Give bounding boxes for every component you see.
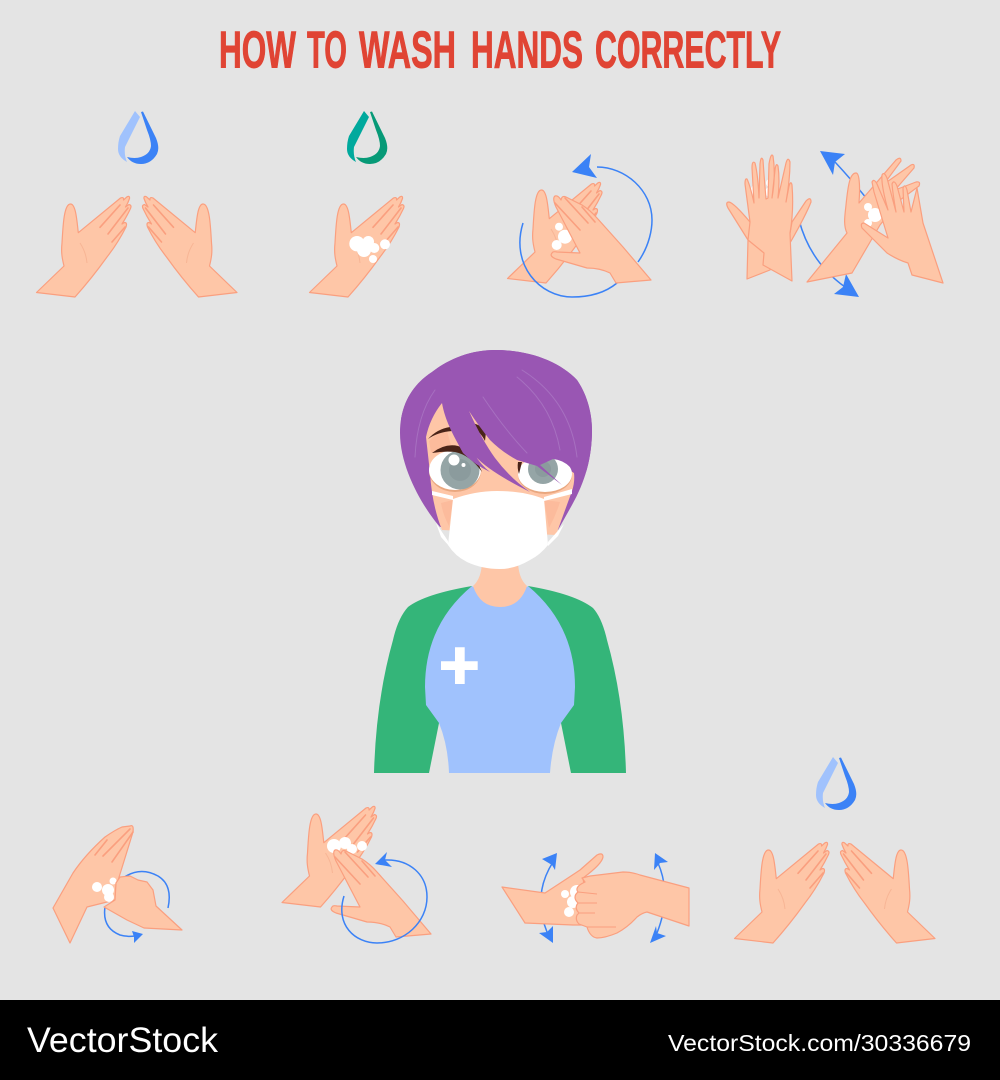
face mask — [432, 489, 572, 569]
step 8: final rinse — [734, 757, 935, 943]
title: WASH — [359, 22, 456, 80]
step 6: rub palm with fingertips — [282, 806, 431, 943]
hand seen from back — [727, 155, 811, 281]
arrows — [105, 871, 169, 943]
neck — [473, 560, 527, 607]
left hand — [502, 854, 603, 925]
soap foam — [552, 223, 572, 250]
hand with fingers up — [53, 826, 133, 943]
watermark bar — [0, 1000, 1000, 1080]
title: HANDS — [471, 22, 583, 80]
front hand — [331, 850, 431, 937]
open hand — [310, 196, 404, 297]
step 5: scrub thumbs — [53, 826, 182, 943]
eyebrow — [428, 423, 486, 441]
title: HOW — [219, 22, 297, 80]
left open hand — [734, 842, 829, 943]
central figure: nurse with mask — [374, 340, 626, 773]
step 7: interlock fingers — [502, 853, 689, 943]
right open hand — [142, 196, 237, 297]
watermark url: VectorStock.com/30336679 — [668, 1030, 971, 1056]
soap foam — [561, 885, 584, 917]
body — [374, 586, 626, 773]
title — [219, 22, 781, 80]
soap foam — [864, 201, 893, 227]
step 1: rinse hands under water — [36, 111, 237, 297]
blue shirt — [425, 586, 575, 773]
icon: water drop green — [347, 111, 387, 164]
hair highlights — [415, 370, 577, 457]
back right hand — [807, 158, 920, 282]
hair back — [400, 350, 592, 530]
face — [426, 403, 574, 535]
fist hand — [104, 876, 182, 930]
soap foam — [349, 236, 390, 263]
hair fringe — [401, 350, 592, 492]
back hand — [508, 182, 602, 283]
white cross — [441, 647, 478, 684]
step 3: rub palms — [508, 154, 652, 297]
soap foam — [92, 878, 116, 902]
right eye — [518, 454, 572, 494]
right hand — [575, 872, 689, 938]
icon: water drop blue — [816, 757, 856, 810]
right open hand — [840, 842, 935, 943]
title: TO — [307, 22, 347, 80]
arrows — [541, 862, 665, 933]
left eye — [429, 445, 482, 492]
green sleeves — [374, 586, 626, 773]
circular arrow — [342, 852, 427, 943]
blush — [429, 431, 560, 528]
finger lines — [95, 829, 133, 862]
title: CORRECTLY — [595, 22, 781, 80]
arrowheads — [539, 853, 668, 943]
finger lines — [578, 892, 616, 927]
back hand — [282, 806, 376, 907]
icon: water drop blue — [118, 111, 158, 164]
step 2: apply soap — [310, 111, 404, 297]
circular arrow — [520, 154, 652, 297]
soap foam — [327, 837, 367, 854]
step 4: rub backs of hands — [727, 151, 943, 297]
watermark logo text: VectorStock — [27, 1021, 219, 1060]
front right hand — [861, 174, 943, 283]
left open hand — [36, 196, 131, 297]
front hand — [551, 196, 651, 283]
arrows — [799, 151, 867, 297]
